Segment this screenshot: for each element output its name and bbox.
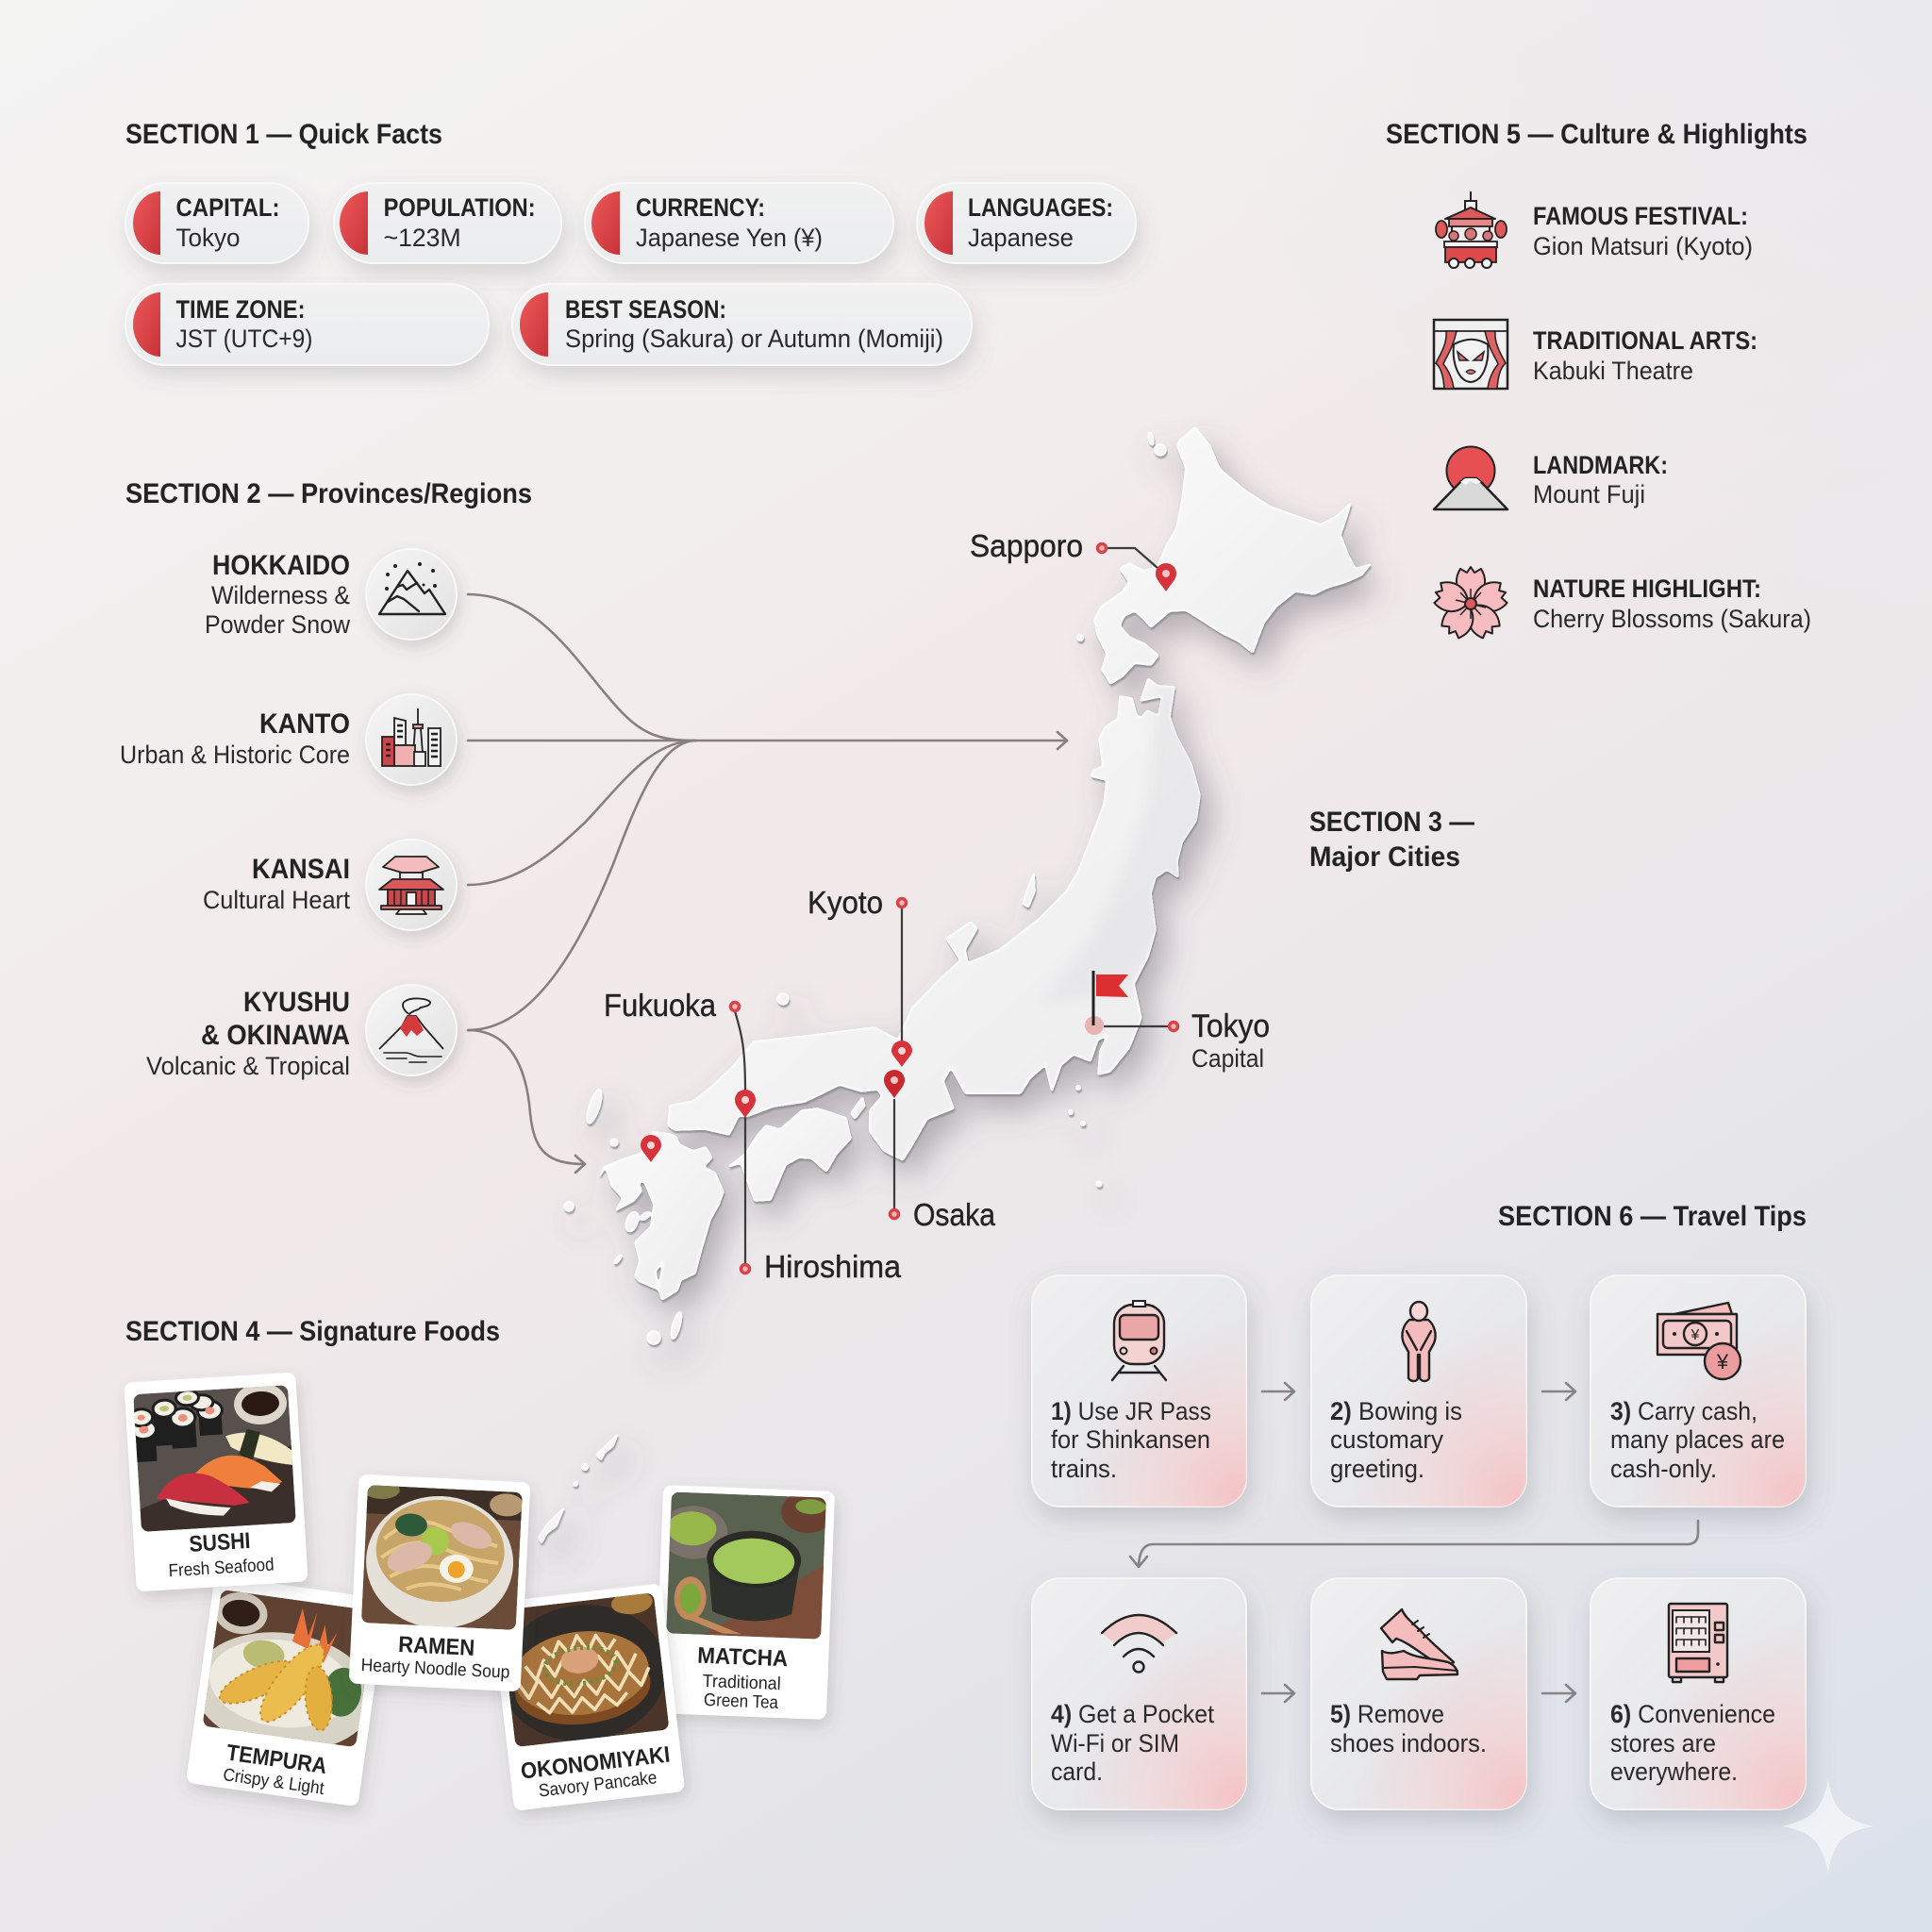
tip card 4: wifi: Wi-Fi or SIM: [1051, 1729, 1179, 1757]
pill: currency: CURRENCY:: [636, 193, 765, 222]
section 6 heading: SECTION 6 — Travel Tips: [1498, 1201, 1807, 1232]
item: traditional arts: TRADITIONAL ARTS:: [1533, 326, 1757, 355]
icon: snowy mountain: [379, 562, 445, 614]
panel: Kyushu & Okinawa region: [146, 985, 457, 1080]
panel: Kyushu & Okinawa region: KYUSHU: [243, 987, 350, 1018]
tip card 4: wifi: 4) Get a Pocket: [1051, 1700, 1214, 1728]
food card: tempura: [179, 1574, 388, 1807]
tip card 1: JR pass: [1032, 1275, 1246, 1507]
connector arrow: row 1 to row 2: [1130, 1521, 1698, 1567]
arrow: [1542, 1383, 1575, 1400]
panel: Kansai region: [203, 840, 457, 930]
tip card 6: vending machine: [1591, 1578, 1806, 1809]
tip card 3: cash: many places are: [1610, 1425, 1785, 1454]
item: landmark: [1434, 447, 1668, 509]
connector lines: regions to map: [468, 594, 1067, 1173]
city: Sapporo: [970, 528, 1176, 591]
item: nature highlight: [1431, 567, 1811, 641]
small islands: [539, 432, 1166, 1543]
tip card 6: vending machine: 6) Convenience: [1610, 1700, 1775, 1728]
food card: tempura: Crispy & Light: [222, 1765, 326, 1799]
Honshu: [668, 678, 1200, 1160]
city: Sapporo: Sapporo: [970, 528, 1083, 563]
Hokkaido: [1094, 427, 1371, 684]
icon: city skyline: [382, 708, 441, 766]
tip card 3: cash: [1591, 1275, 1806, 1507]
icon: vending machine: [1669, 1604, 1727, 1682]
tip card 5: shoes: 5) Remove: [1330, 1700, 1444, 1728]
panel: travel tips: [1032, 1275, 1806, 1809]
arrow: [1262, 1383, 1294, 1400]
item: traditional arts: [1434, 320, 1757, 389]
item: famous festival: Gion Matsuri (Kyoto): [1533, 232, 1753, 260]
section 5 heading: SECTION 5 — Culture & Highlights: [1386, 119, 1807, 150]
food card: okonomiyaki: [491, 1583, 685, 1811]
food card: ramen: RAMEN: [398, 1632, 475, 1661]
item: nature highlight: Cherry Blossoms (Sakura): [1533, 605, 1811, 633]
tip card 1: JR pass: for Shinkansen: [1051, 1425, 1210, 1454]
city: Tokyo with flag: [1085, 971, 1270, 1073]
pill: population: [334, 183, 561, 263]
pill: capital: [125, 183, 308, 263]
city: Osaka: Osaka: [913, 1197, 996, 1232]
food card: matcha: Green Tea: [704, 1690, 779, 1713]
item: traditional arts: Kabuki Theatre: [1533, 357, 1693, 385]
section 2 heading: SECTION 2 — Provinces/Regions: [125, 478, 532, 509]
panel: culture highlights: [1431, 192, 1811, 641]
icon: shoes: [1381, 1609, 1457, 1679]
item: famous festival: [1436, 192, 1753, 268]
item: famous festival: FAMOUS FESTIVAL:: [1533, 202, 1748, 230]
tip card 6: vending machine: stores are: [1610, 1729, 1716, 1757]
pill: best season: [512, 284, 972, 365]
icon: yen cash: [1657, 1303, 1740, 1379]
panel: Hokkaido region: HOKKAIDO: [212, 550, 350, 581]
icon: bowing person: [1402, 1302, 1436, 1381]
tip card 4: wifi: card.: [1051, 1757, 1103, 1786]
section 4 heading: SECTION 4 — Signature Foods: [125, 1316, 500, 1347]
food card: okonomiyaki: Savory Pancake: [538, 1768, 658, 1802]
city: Hiroshima: [735, 1090, 902, 1284]
city: Fukuoka: Fukuoka: [604, 988, 717, 1023]
panel: Kanto region: KANTO: [259, 708, 350, 740]
panel: Kyushu & Okinawa region: Volcanic & Tropical: [146, 1052, 350, 1080]
panel: Kansai region: KANSAI: [252, 854, 350, 885]
city: Tokyo with flag: Tokyo: [1191, 1008, 1270, 1044]
food card: tempura: TEMPURA: [225, 1740, 328, 1779]
tip card 4: wifi: [1032, 1578, 1246, 1809]
section 3 heading: [1309, 807, 1474, 873]
panel: Kansai region: Cultural Heart: [203, 886, 350, 914]
food card: ramen: Hearty Noodle Soup: [360, 1656, 510, 1683]
pill: currency: Japanese Yen (¥): [636, 224, 823, 252]
panel: Hokkaido region: Wilderness &: [211, 581, 350, 609]
tip card 2: bowing: customary: [1330, 1425, 1443, 1454]
pill: languages: LANGUAGES:: [968, 193, 1113, 222]
pill: best season: BEST SEASON:: [565, 295, 726, 324]
city: Osaka: [884, 1070, 996, 1232]
pill: time zone: JST (UTC+9): [175, 325, 313, 353]
pill: population: POPULATION:: [384, 193, 536, 222]
city: Tokyo with flag: Capital: [1191, 1044, 1264, 1073]
city: Kyoto: Kyoto: [808, 885, 883, 920]
map of Japan: [539, 427, 1371, 1543]
item: landmark: Mount Fuji: [1533, 480, 1645, 508]
panel: Kanto region: [120, 694, 457, 785]
icon: yen cash: ¥: [1690, 1327, 1700, 1343]
tip card 5: shoes: shoes indoors.: [1330, 1729, 1487, 1757]
item: nature highlight: NATURE HIGHLIGHT:: [1533, 575, 1761, 603]
tip card 1: JR pass: 1) Use JR Pass: [1051, 1397, 1211, 1425]
panel: signature foods: [124, 1373, 835, 1811]
section 1 heading: SECTION 1 — Quick Facts: [125, 119, 442, 150]
pill: time zone: TIME ZONE:: [175, 295, 306, 324]
food card: matcha: MATCHA: [697, 1643, 789, 1672]
city: Hiroshima: Hiroshima: [764, 1249, 902, 1284]
item: landmark: LANDMARK:: [1533, 451, 1668, 479]
tip card 2: bowing: 2) Bowing is: [1330, 1397, 1462, 1425]
panel: Kyushu & Okinawa region: & OKINAWA: [201, 1020, 350, 1051]
arrow: [1542, 1685, 1575, 1702]
arrow: [1262, 1685, 1294, 1702]
pill: currency: [585, 183, 893, 263]
city: Kyoto: [808, 885, 912, 1067]
food card: ramen: [349, 1474, 530, 1691]
tip card 6: vending machine: everywhere.: [1610, 1757, 1738, 1786]
tip card 2: bowing: [1311, 1275, 1526, 1507]
icon: temple: [379, 857, 443, 914]
tip card 2: bowing: greeting.: [1330, 1455, 1424, 1483]
pill: languages: [917, 183, 1136, 263]
icon: volcano: [379, 998, 443, 1062]
panel: quick facts pills: [125, 183, 1136, 365]
food card: sushi: SUSHI: [189, 1528, 251, 1557]
icon: yen cash: ¥: [1716, 1350, 1729, 1374]
panel: Hokkaido region: Powder Snow: [205, 610, 350, 639]
food card: okonomiyaki: OKONOMIYAKI: [520, 1741, 672, 1785]
pill: capital: CAPITAL:: [175, 193, 279, 222]
pill: best season: Spring (Sakura) or Autumn (Momiji): [565, 325, 943, 353]
tip card 1: JR pass: trains.: [1051, 1455, 1117, 1483]
ridge shading on Honshu: [1066, 692, 1200, 991]
pill: languages: Japanese: [968, 224, 1074, 252]
pill: time zone: [125, 284, 489, 365]
food card: matcha: [653, 1485, 835, 1720]
tip card 5: shoes: [1311, 1578, 1526, 1809]
city: Fukuoka: [604, 988, 745, 1162]
panel: Hokkaido region: [205, 549, 457, 640]
Kyushu: [599, 1132, 724, 1300]
panel: Kanto region: Urban & Historic Core: [120, 741, 350, 769]
icon: sparkle watermark: [1782, 1779, 1874, 1874]
tip card 3: cash: 3) Carry cash,: [1610, 1397, 1757, 1425]
tip card 3: cash: cash-only.: [1610, 1455, 1717, 1483]
Shikoku: [728, 1108, 851, 1201]
pill: capital: Tokyo: [175, 224, 240, 252]
food card: matcha: Traditional: [702, 1672, 781, 1694]
pill: population: ~123M: [384, 224, 461, 252]
icon: train: [1112, 1301, 1166, 1380]
icon: wifi: [1102, 1615, 1176, 1672]
food card: sushi: [124, 1373, 308, 1591]
section 3 heading: SECTION 3 —: [1309, 807, 1474, 838]
food card: sushi: Fresh Seafood: [168, 1555, 275, 1581]
section 3 heading: Major Cities: [1309, 841, 1460, 873]
